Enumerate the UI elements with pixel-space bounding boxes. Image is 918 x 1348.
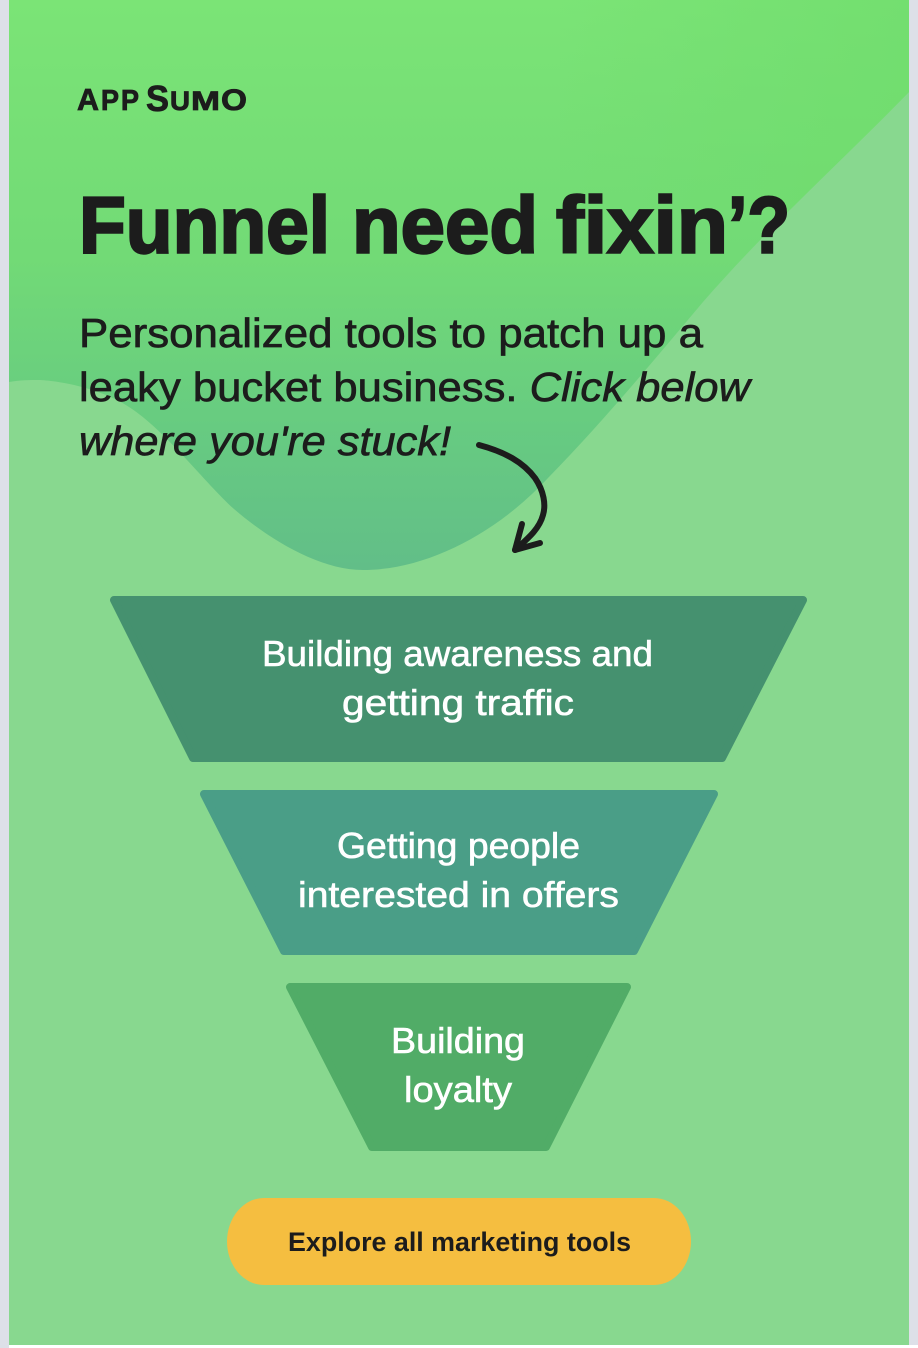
subtitle: where you're stuck! xyxy=(79,418,451,464)
logo: M xyxy=(191,86,220,116)
title: need xyxy=(352,180,538,270)
subtitle xyxy=(79,310,753,464)
logo xyxy=(77,78,247,119)
funnel tier 3: loyalty xyxy=(404,1069,512,1110)
funnel tier 3 xyxy=(290,987,627,1147)
logo: A xyxy=(77,82,99,117)
funnel tier 3: Building xyxy=(391,1020,525,1061)
title xyxy=(79,180,790,270)
logo: O xyxy=(221,84,247,117)
arrow xyxy=(479,445,544,550)
button: Explore all marketing tools xyxy=(288,1227,631,1257)
title: fixin xyxy=(556,180,728,270)
title: Funnel xyxy=(79,180,330,270)
logo: P xyxy=(121,85,139,117)
funnel tier 1: Building awareness and xyxy=(262,633,653,674)
funnel tier 1: getting traffic xyxy=(342,682,574,723)
funnel tier 2: interested in offers xyxy=(298,874,619,915)
logo: U xyxy=(170,86,190,116)
green funnel-shaped backdrop xyxy=(9,0,909,570)
subtitle: leaky bucket business. Click below xyxy=(79,364,753,410)
logo: S xyxy=(146,78,169,119)
funnel tier 2 xyxy=(204,794,714,951)
funnel tier 2: Getting people xyxy=(337,825,580,866)
button xyxy=(227,1198,691,1285)
subtitle: Personalized tools to patch up a xyxy=(79,310,703,356)
funnel tier 1 xyxy=(114,600,803,758)
title: ’? xyxy=(728,180,790,270)
logo: P xyxy=(101,85,119,117)
